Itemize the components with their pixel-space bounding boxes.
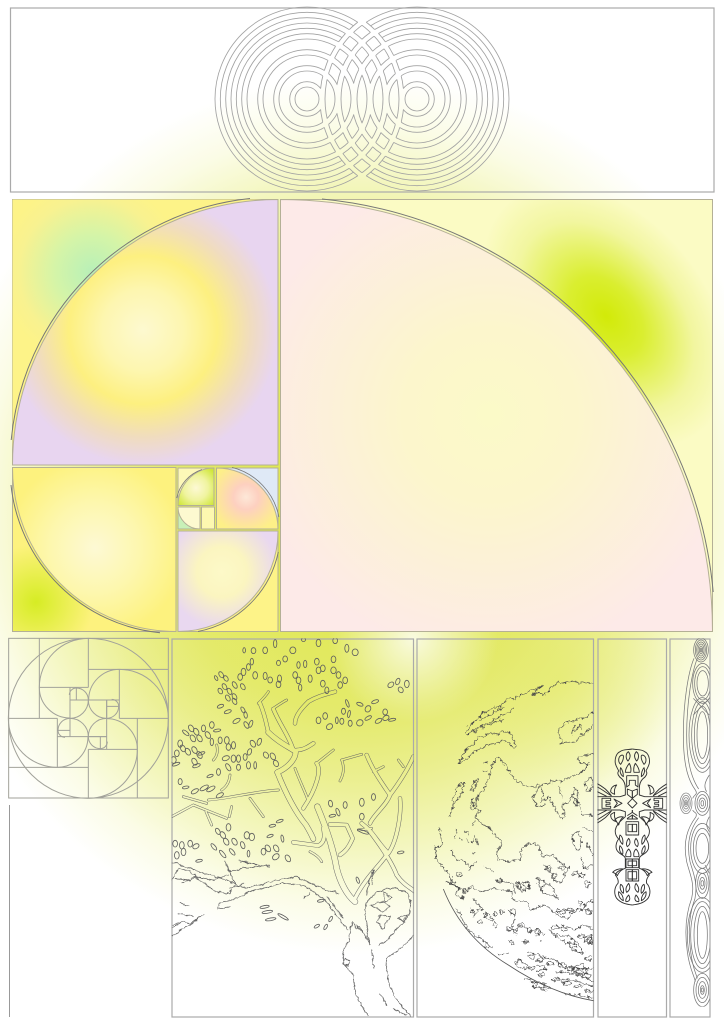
concentric oval ornament [680,638,710,1007]
bottom long oval [687,897,710,973]
upper oval [693,663,713,703]
tree branches [172,690,414,905]
middle ring oval [695,791,710,815]
square 4: lilac small quadrant [178,531,278,632]
square 5: peach quadrant [216,467,279,529]
globe limb [443,889,595,1001]
square 1: large pink quadrant [280,199,713,632]
top ovals [694,638,708,662]
continents and islands [435,681,594,998]
panel: tree [170,635,423,1022]
square 2: lilac quadrant [11,198,278,465]
panel: top frame with interlaced double-spiral knot [10,2,714,196]
panel: fourfold golden spiral [8,638,168,798]
square 7: pale quadrant [178,507,200,529]
tree trunk and limbs [172,860,414,1017]
bottom ring oval [694,973,711,1007]
ornamental cross [597,749,667,905]
small oval [696,868,709,898]
tree leaves [171,638,409,930]
cross left half [597,749,632,905]
square 8: tiny yellow [202,507,214,529]
panel: ornamental strip [669,638,711,1018]
square 6: lime quadrant [177,468,214,506]
long oval [688,697,710,773]
panel: cross [597,639,667,1017]
side knob [680,793,692,814]
globe coastlines [435,681,595,1001]
tree line drawing [170,635,423,1022]
interlaced rings knot [210,2,514,196]
wavy contour lines [683,658,709,982]
square 3: yellow quadrant [11,468,176,633]
lower oval [690,823,710,874]
panel: globe [417,639,595,1017]
stray frame line under fourfold panel [8,805,10,1017]
panel: golden-ratio spiral squares [11,198,713,633]
